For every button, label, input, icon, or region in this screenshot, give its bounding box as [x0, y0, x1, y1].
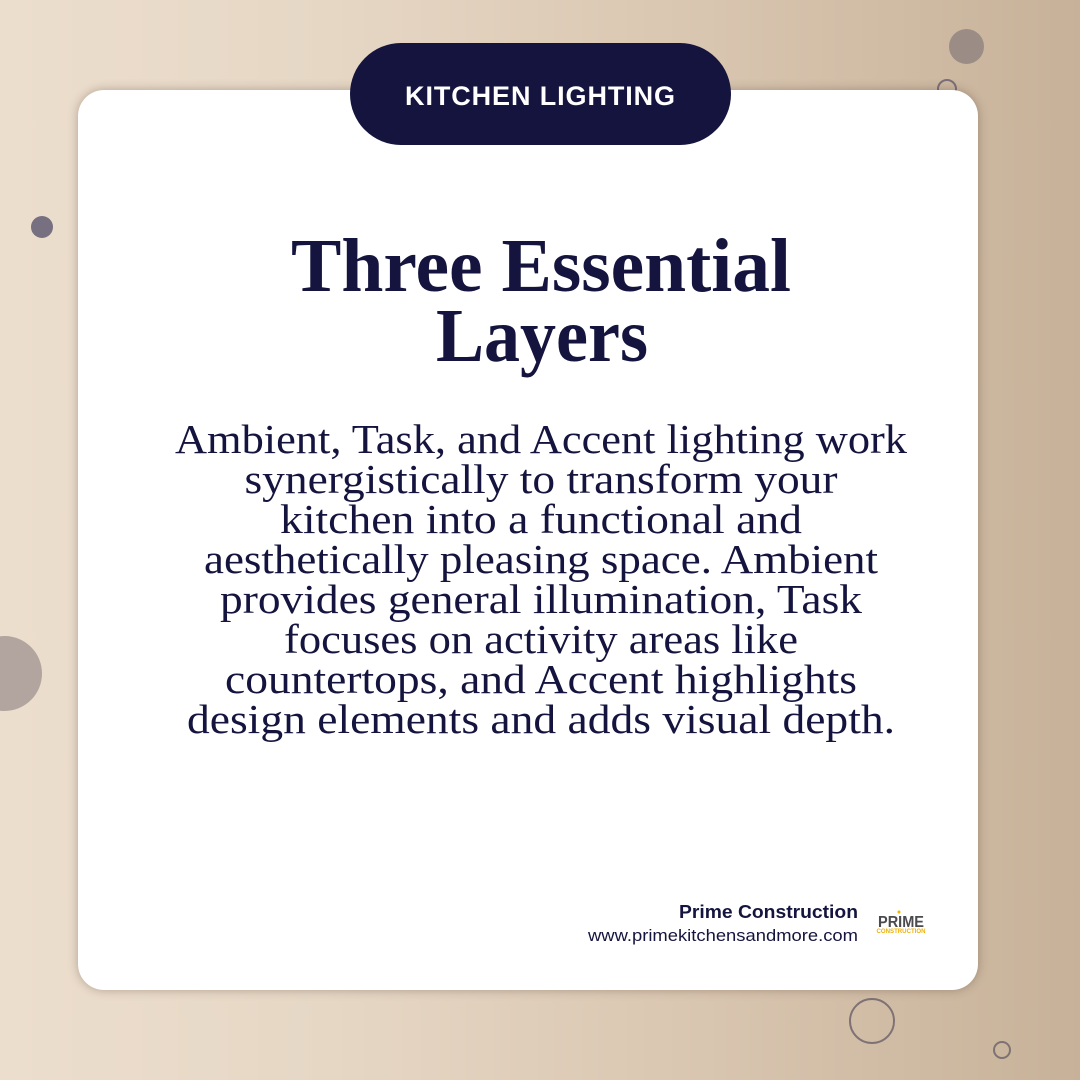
heading pill: kitchen lighting: KITCHEN LIGHTING	[405, 81, 676, 111]
body text: aesthetically pleasing space. Ambient	[204, 536, 879, 582]
body text: Ambient, Task, and Accent lighting work	[175, 416, 908, 462]
heading pill: kitchen lighting	[350, 43, 731, 145]
decorative circle: top right outline	[937, 79, 957, 99]
body text: countertops, and Accent highlights	[225, 656, 857, 702]
title	[291, 224, 791, 378]
body text: synergistically to transform your	[244, 456, 838, 502]
decorative circle: left large filled	[0, 636, 42, 711]
panel: white card	[78, 90, 978, 990]
decorative circle: bottom outline small	[993, 1041, 1011, 1059]
decorative circle: bottom outline large	[849, 998, 895, 1044]
body text: design elements and adds visual depth.	[187, 696, 895, 742]
logo: prime construction: PRIME	[878, 914, 924, 931]
footer: company name and website	[587, 902, 858, 945]
body text	[175, 416, 908, 742]
body text: kitchen into a functional and	[280, 496, 802, 542]
logo: prime construction: CONSTRUCTION	[876, 928, 926, 935]
decorative circle: left small filled	[31, 216, 53, 238]
logo: prime construction	[876, 910, 926, 935]
body text: focuses on activity areas like	[284, 616, 798, 662]
decorative circle: top right filled	[949, 29, 984, 64]
body text: provides general illumination, Task	[220, 576, 863, 622]
footer: company name and website: www.primekitchensandmore.com	[587, 926, 858, 945]
title: Layers	[436, 294, 648, 378]
footer: company name and website: Prime Construction	[679, 902, 858, 922]
title: Three Essential	[291, 224, 791, 308]
